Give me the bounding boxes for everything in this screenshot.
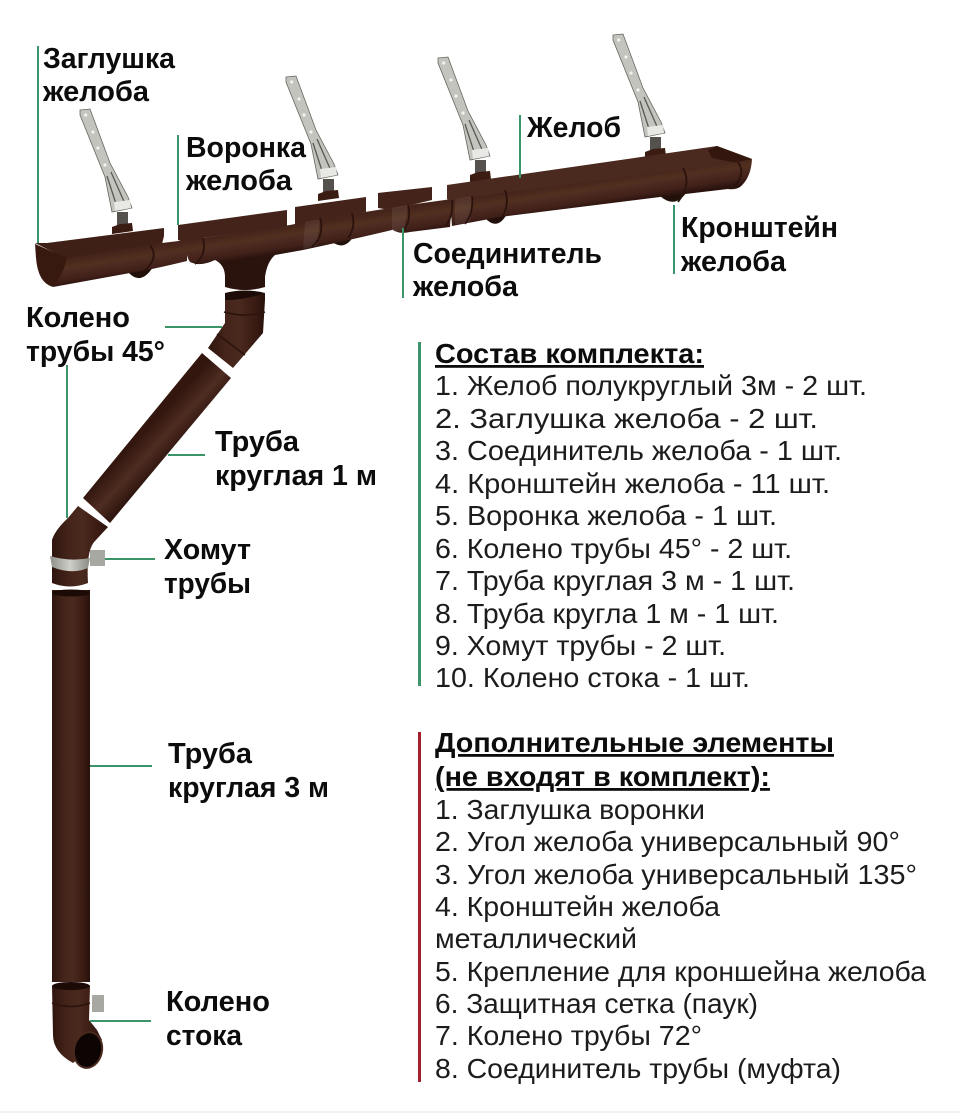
pipe 3 m [52,590,90,982]
additional list: 1. Заглушка воронки [435,794,705,825]
panel: kit contents [418,338,867,693]
label: pipe elbow: Колено [26,302,130,334]
kit list: 1. Желоб полукруглый 3м - 2 шт. [435,370,867,401]
green leader lines [38,46,674,1021]
label: pipe 1 m: Труба [215,426,300,458]
kit list: 4. Кронштейн желоба - 11 шт. [435,468,830,499]
hanging bracket hooks under gutter [128,190,688,278]
kit list: 5. Воронка желоба - 1 шт. [435,500,777,531]
gutter connector [390,199,452,233]
kit list: 2. Заглушка желоба - 2 шт. [435,403,818,434]
gutter back walls and interior [35,146,752,259]
heading: additional elements: (не входят в комплект): [435,761,770,792]
label: pipe clamp: трубы [164,568,251,600]
illustration: gutter system [35,34,752,1072]
label: pipe 3 m: круглая 3 м [168,772,329,804]
pipe 1 m [83,353,231,523]
bottom page strip [0,1111,960,1113]
label: gutter bracket: желоба [680,246,787,278]
label: pipe clamp: Хомут [164,534,251,566]
heading: kit contents: Состав комплекта: [435,338,704,369]
red side rule [418,732,421,1082]
label: gutter funnel: Воронка [186,132,307,164]
panel: additional elements [418,727,926,1084]
drain elbow [52,982,107,1072]
label: gutter bracket: Кронштейн [681,212,838,244]
additional list: металлический [435,923,637,954]
additional list: 7. Колено трубы 72° [435,1020,702,1051]
label: gutter end cap: Заглушка [43,43,176,75]
label: pipe 3 m: Труба [168,738,253,770]
label: gutter end cap: желоба [42,76,150,108]
additional list: 4. Кронштейн желоба [435,891,720,922]
gutter seams [143,162,741,272]
additional list: 8. Соединитель трубы (муфта) [435,1053,841,1084]
label: gutter connector: желоба [412,271,519,303]
heading: additional elements: Дополнительные элементы [435,727,834,758]
additional list [435,794,926,1084]
gutter middle section [303,208,392,250]
kit list: 3. Соединитель желоба - 1 шт. [435,435,842,466]
additional list: 2. Угол желоба универсальный 90° [435,826,900,857]
label: gutter connector: Соединитель [413,238,602,270]
additional list: 3. Угол желоба универсальный 135° [435,859,917,890]
lower elbow 45 degrees [52,506,108,586]
gutter brackets [80,34,666,234]
pipe clamp [50,550,105,571]
label: gutter funnel: желоба [185,165,293,197]
gutter left section with end cap [35,240,187,287]
kit list: 6. Колено трубы 45° - 2 шт. [435,533,792,564]
gutter outlet funnel [186,222,305,290]
additional list: 5. Крепление для кроншейна желоба [435,956,926,987]
kit list: 10. Колено стока - 1 шт. [435,662,750,693]
kit list: 9. Хомут трубы - 2 шт. [435,630,726,661]
label: pipe elbow: трубы 45° [26,336,165,368]
label: drain elbow: Колено [166,986,270,1018]
kit list [435,370,867,693]
label: pipe 1 m: круглая 1 м [215,460,377,492]
green side rule [418,342,421,686]
label: drain elbow: стока [166,1020,243,1052]
kit list: 8. Труба кругла 1 м - 1 шт. [435,598,779,629]
upper elbow 45 degrees [208,290,265,368]
kit list: 7. Труба круглая 3 м - 1 шт. [435,565,795,596]
lighter socket bands [303,196,472,249]
additional list: 6. Защитная сетка (паук) [435,988,758,1019]
label: gutter: Желоб [526,112,621,144]
long gutter section [450,159,752,226]
